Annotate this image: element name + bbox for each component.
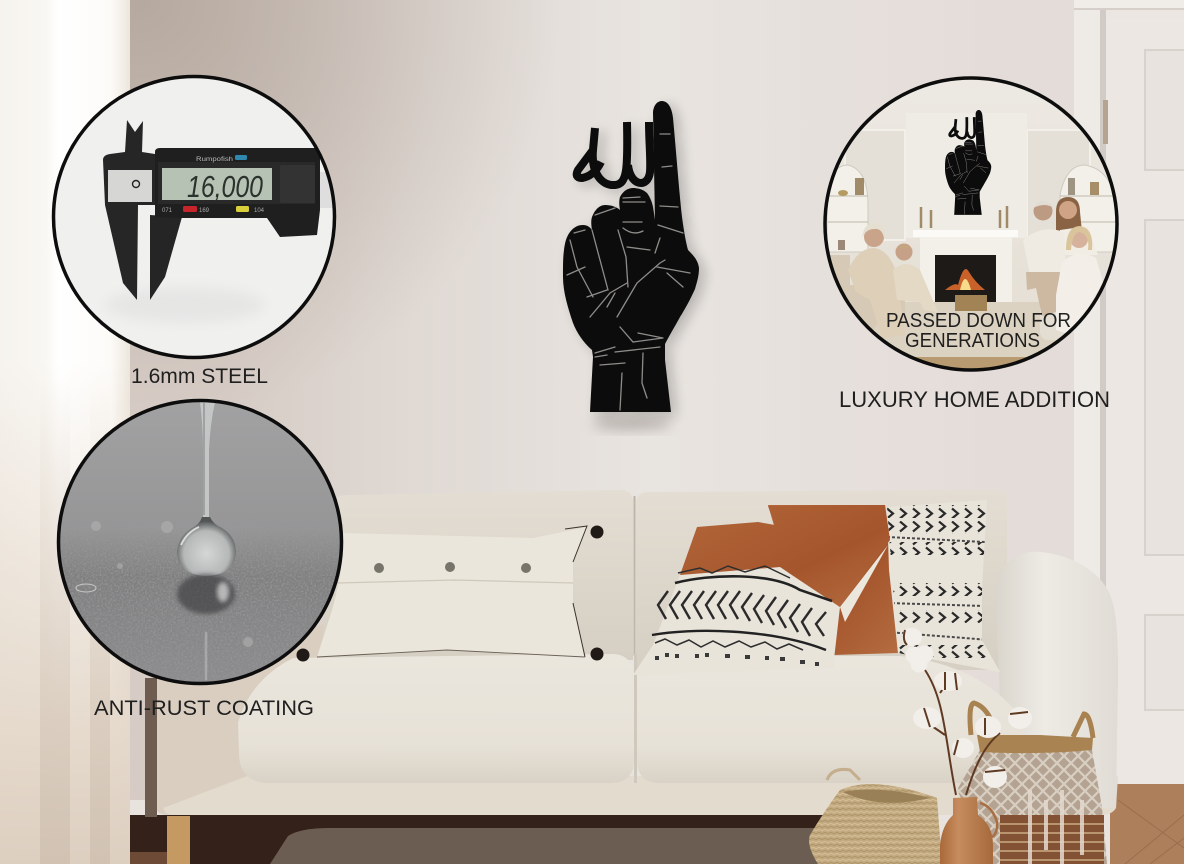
cream pillow: [296, 526, 604, 662]
floor: [130, 784, 1184, 864]
left back cushion: [320, 490, 633, 660]
door frame and door: [1074, 0, 1184, 786]
cushion seam: [634, 496, 636, 656]
girl: [1056, 226, 1103, 340]
mantel: [913, 230, 1018, 237]
caption inside circle: [886, 310, 1071, 352]
fixed jaw: [103, 120, 155, 300]
circle: water droplet: [55, 398, 345, 690]
scale: [108, 170, 152, 202]
right arm: [995, 552, 1118, 808]
left seat cushion: [238, 654, 634, 783]
base: [163, 776, 1118, 815]
belly basket: [809, 769, 942, 864]
circle: caliper: 169: [199, 208, 210, 214]
man: [1023, 200, 1066, 316]
water stream: [200, 402, 215, 517]
shelves right: [1060, 165, 1116, 252]
back leather pillow: [768, 505, 898, 655]
macrame basket: [957, 703, 1107, 864]
patterned pillow right: [887, 500, 1000, 672]
mini wall art: [945, 110, 991, 215]
shelves left: [827, 165, 868, 252]
label: anti-rust: ANTI-RUST COATING: [94, 697, 314, 720]
front pillow: [633, 505, 890, 675]
dark post behind sofa: [145, 678, 157, 817]
circle: caliper: 071: [162, 208, 173, 214]
reflection: [177, 574, 235, 614]
lcd screen: [162, 168, 272, 200]
lcd reading: 16,000: [187, 169, 263, 204]
wall: [130, 0, 1080, 800]
right back cushion: [636, 490, 1007, 670]
brand label: Rumpofish: [196, 157, 233, 163]
fireplace: [935, 255, 996, 302]
right seat cushion: [637, 656, 1025, 783]
centre wall: [906, 165, 1026, 238]
left arm: [157, 620, 340, 815]
cotton bolls: [902, 628, 1032, 788]
grandmother: [848, 223, 905, 338]
side panels: [845, 130, 1090, 240]
display unit: [155, 148, 320, 237]
stems: [925, 670, 1000, 795]
label: luxury home addition: LUXURY HOME ADDITION: [839, 387, 1110, 412]
caption inside circle: GENERATIONS: [905, 330, 1040, 352]
circle: caliper: [50, 75, 340, 360]
label: steel: 1.6mm STEEL: [131, 365, 268, 388]
circle: caliper: 104: [254, 208, 265, 214]
moving jaw: [150, 215, 182, 300]
small ring droplet: [76, 584, 96, 592]
woman: [1056, 197, 1098, 255]
vase: [940, 797, 993, 864]
caption inside circle: PASSED DOWN FOR: [886, 310, 1071, 332]
sofa: [145, 490, 1118, 864]
vase with cotton stems: [902, 628, 1032, 864]
curtain: [0, 0, 130, 864]
sofa right: [1040, 302, 1092, 340]
candle holders: [921, 206, 1007, 228]
sofa leg: [167, 816, 190, 864]
rug: [874, 302, 1056, 357]
sofa left: [830, 255, 905, 335]
wall art shadow: [592, 418, 672, 430]
speaker pad: [280, 165, 315, 203]
circle: family room: [820, 75, 1120, 375]
child left: [893, 244, 934, 302]
right beam: [320, 172, 332, 208]
seat seam: [634, 654, 637, 783]
droplet: [177, 517, 236, 576]
wall art: hand and calligraphy: [563, 101, 705, 430]
